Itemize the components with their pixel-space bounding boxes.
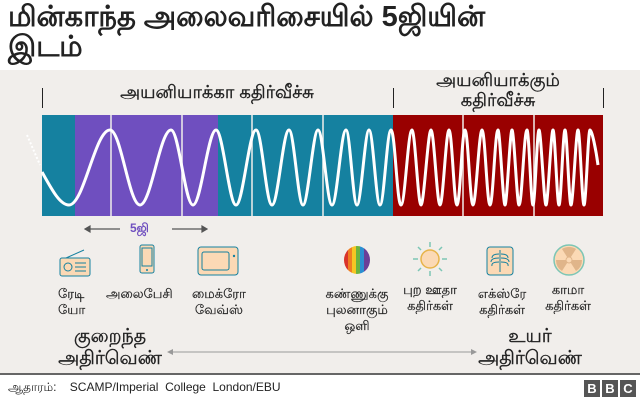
label: ultraviolet: புற ஊதா bbox=[403, 282, 457, 297]
label: gamma bbox=[545, 282, 591, 314]
label: ultraviolet bbox=[403, 282, 457, 314]
title: மின்காந்த அலைவரிசையில் 5ஜியின் bbox=[8, 1, 485, 33]
low frequency label bbox=[58, 326, 162, 370]
title: இடம் bbox=[8, 31, 83, 63]
high frequency label: அதிர்வெண் bbox=[478, 348, 582, 369]
label: x-ray: கதிர்கள் bbox=[479, 302, 525, 317]
label: visible light: கண்ணுக்கு bbox=[326, 286, 388, 301]
icon: sun bbox=[413, 242, 447, 276]
label: x-ray: எக்ஸ்ரே bbox=[478, 286, 526, 301]
label: non-ionizing: அயனியாக்கா கதிர்வீச்சு bbox=[120, 82, 314, 102]
icon: microwave bbox=[198, 246, 238, 276]
label: ionizing: அயனியாக்கும் bbox=[436, 70, 560, 90]
label: radio: ரேடி bbox=[58, 286, 84, 301]
label: radio: யோ bbox=[58, 302, 85, 317]
low frequency label: குறைந்த bbox=[74, 326, 146, 347]
icon: radio bbox=[60, 250, 90, 276]
5G range marker bbox=[84, 221, 208, 236]
title bbox=[8, 1, 486, 65]
label: visible light: புலனாகும் bbox=[326, 302, 388, 317]
label: microwave: வேவ்ஸ் bbox=[195, 302, 243, 317]
icon: x-ray bbox=[486, 246, 514, 276]
high frequency label bbox=[478, 326, 582, 370]
logo: BBC: B bbox=[587, 381, 597, 396]
logo: BBC: C bbox=[623, 381, 633, 396]
icon: visible light bbox=[344, 246, 370, 274]
label: ionizing: கதிர்வீச்சு bbox=[461, 90, 535, 110]
label: microwave: மைக்ரோ bbox=[192, 286, 246, 301]
source text: ஆதாரம்: SCAMP/Imperial College London/EBU bbox=[8, 380, 281, 394]
label: mobile: அலைபேசி bbox=[106, 286, 173, 301]
label: microwave bbox=[192, 286, 246, 317]
low frequency label: அதிர்வெண் bbox=[58, 348, 162, 369]
label: x-ray bbox=[478, 286, 526, 318]
icon labels bbox=[58, 282, 591, 334]
icon: gamma bbox=[553, 244, 585, 276]
label: visible light bbox=[326, 286, 388, 334]
label: visible light: ஒளி bbox=[344, 318, 370, 333]
logo: BBC: B bbox=[605, 381, 615, 396]
5G range marker: 5ஜி bbox=[130, 221, 149, 235]
spectrum chart bbox=[26, 115, 603, 216]
label: ionizing bbox=[436, 70, 560, 112]
label: gamma: காமா bbox=[552, 282, 584, 297]
logo: BBC bbox=[584, 380, 636, 397]
icon: phone bbox=[140, 244, 154, 274]
header background bbox=[0, 0, 640, 70]
label: radio bbox=[58, 286, 86, 317]
label: ultraviolet: கதிர்கள் bbox=[407, 298, 453, 313]
footer bbox=[0, 373, 640, 402]
high frequency label: உயர் bbox=[508, 326, 552, 347]
tick marks bbox=[42, 88, 43, 108]
frequency arrow bbox=[167, 349, 477, 355]
label: gamma: கதிர்கள் bbox=[545, 298, 591, 313]
